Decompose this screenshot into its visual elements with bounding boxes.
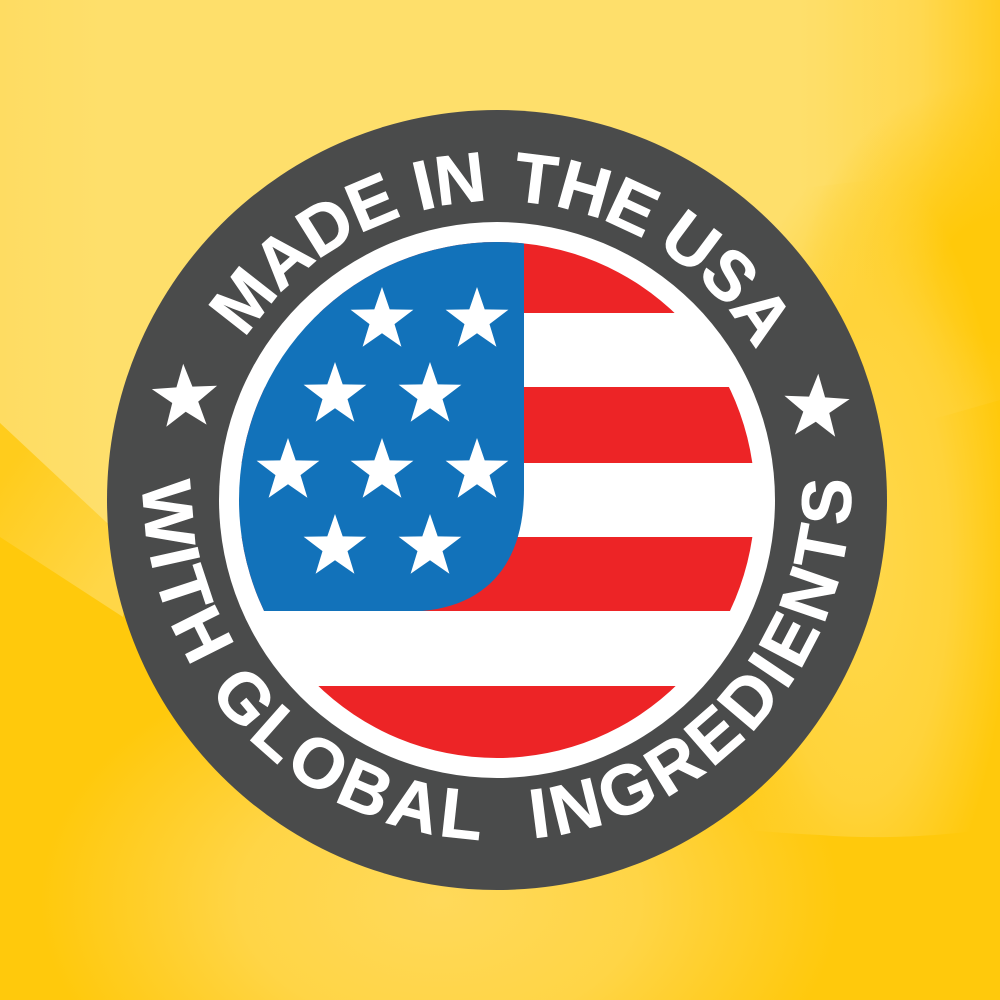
- heading: with global ingredients: WITH GLOBAL INGREDIENTS: [142, 478, 852, 840]
- white inner ring: [219, 222, 775, 778]
- canton stars: [257, 287, 508, 574]
- left star: [151, 362, 219, 427]
- badge dark ring: [107, 110, 887, 890]
- stripes: [230, 242, 770, 760]
- blue canton: [230, 240, 524, 611]
- heading: made in the usa: MADE IN THE USA: [208, 152, 786, 349]
- right star: [782, 372, 851, 437]
- flag: [230, 240, 770, 760]
